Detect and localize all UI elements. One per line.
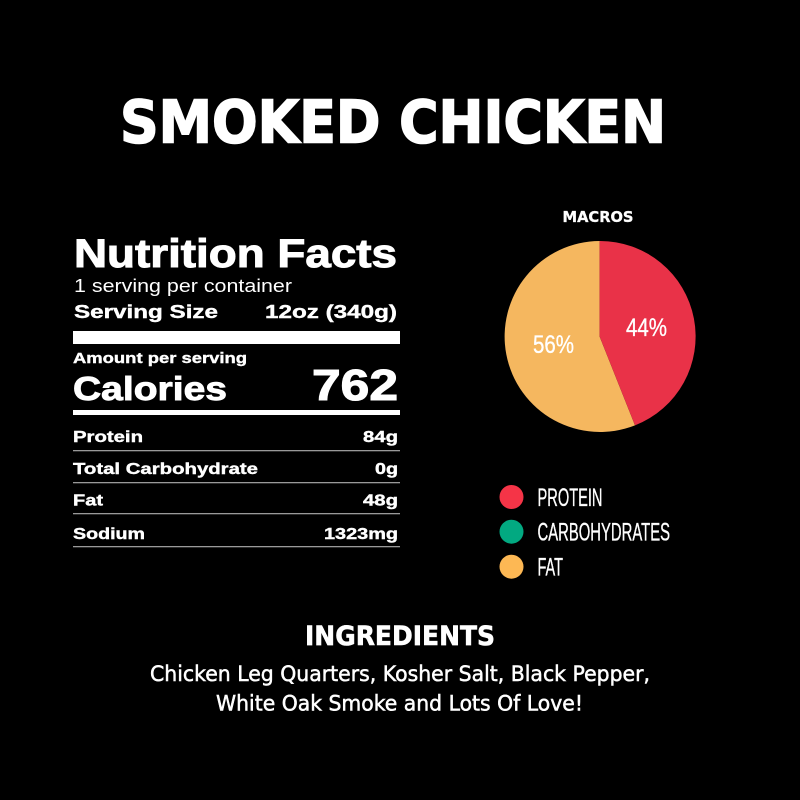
ingredients text: White Oak Smoke and Lots Of Love!	[216, 691, 583, 715]
amount per serving: Amount per serving	[73, 350, 247, 367]
row: total carbohydrate: 0g	[375, 461, 398, 478]
title: SMOKED CHICKEN	[120, 88, 666, 156]
row: total carbohydrate: Total Carbohydrate	[73, 461, 258, 478]
row: fat: Fat	[73, 492, 103, 510]
heading: macros: MACROS	[562, 208, 634, 226]
calories	[73, 361, 398, 410]
row: sodium: Sodium	[73, 526, 145, 543]
row: protein: Protein	[73, 429, 143, 446]
legend item: carbohydrates	[500, 518, 670, 546]
row: protein	[73, 429, 398, 446]
pie chart: macros	[505, 241, 696, 432]
heading: ingredients: INGREDIENTS	[305, 621, 495, 652]
label: 56%: 56%	[533, 331, 574, 359]
legend item: protein	[500, 484, 602, 512]
ingredients text	[150, 662, 650, 715]
row: sodium: 1323mg	[324, 526, 398, 543]
slice: protein 44%	[600, 241, 696, 425]
heading: nutrition facts: Nutrition Facts	[74, 232, 397, 276]
serving size: 12oz (340g)	[265, 301, 397, 322]
servings per container: 1 serving per container	[74, 275, 292, 296]
calories: Calories	[73, 370, 227, 407]
serving size: Serving Size	[74, 301, 218, 322]
legend	[500, 484, 670, 582]
ingredients text: Chicken Leg Quarters, Kosher Salt, Black Pepper,	[150, 662, 650, 686]
legend item: protein: PROTEIN	[538, 484, 602, 512]
legend item: fat: FAT	[538, 554, 563, 582]
legend item: fat	[500, 554, 563, 582]
panel: nutrition facts	[73, 232, 400, 547]
calories: 762	[312, 361, 398, 410]
row: protein: 84g	[363, 429, 398, 446]
label: 44%: 44%	[626, 314, 667, 342]
row: fat	[73, 492, 398, 510]
serving size	[74, 301, 397, 322]
row: total carbohydrate	[73, 461, 398, 478]
row: sodium	[73, 526, 398, 543]
slice: fat 56%	[505, 241, 635, 432]
legend item: carbohydrates: CARBOHYDRATES	[538, 518, 670, 546]
row: fat: 48g	[363, 492, 398, 510]
